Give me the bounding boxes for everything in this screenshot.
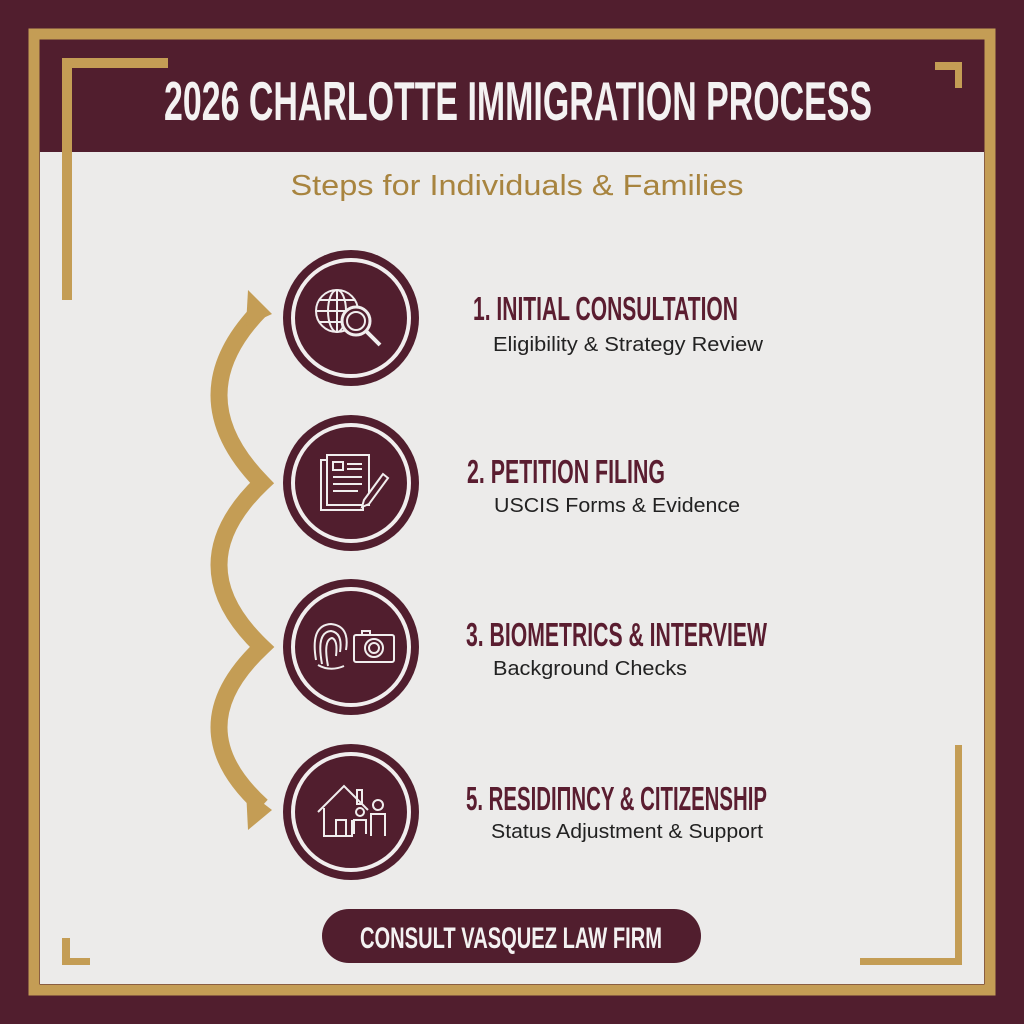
step circles — [283, 250, 419, 880]
icon: document pen — [283, 415, 419, 551]
button: CONSULT VASQUEZ LAW FIRM — [360, 922, 662, 955]
text: USCIS Forms & Evidence — [494, 495, 740, 517]
step texts: 1. INITIAL CONSULTATION — [473, 290, 738, 327]
icon: fingerprint camera — [283, 579, 419, 715]
text: Status Adjustment & Support — [491, 821, 763, 843]
icon: globe search — [283, 250, 419, 386]
text: Eligibility & Strategy Review — [493, 334, 764, 356]
icon: house family — [283, 744, 419, 880]
text: Background Checks — [493, 658, 687, 680]
corner brackets — [62, 58, 962, 965]
step texts: 5. RESIDIΠNCY & CITIZENSHIP — [466, 780, 767, 817]
header band — [40, 40, 984, 152]
step texts — [466, 290, 768, 817]
step texts: 3. BIOMETRICS & INTERVIEW — [466, 616, 768, 653]
step texts: 2. PETITION FILING — [467, 453, 665, 490]
arrow: gold flow — [219, 290, 272, 830]
button — [322, 909, 701, 963]
subtitle: Steps for Individuals & Families — [290, 170, 744, 202]
